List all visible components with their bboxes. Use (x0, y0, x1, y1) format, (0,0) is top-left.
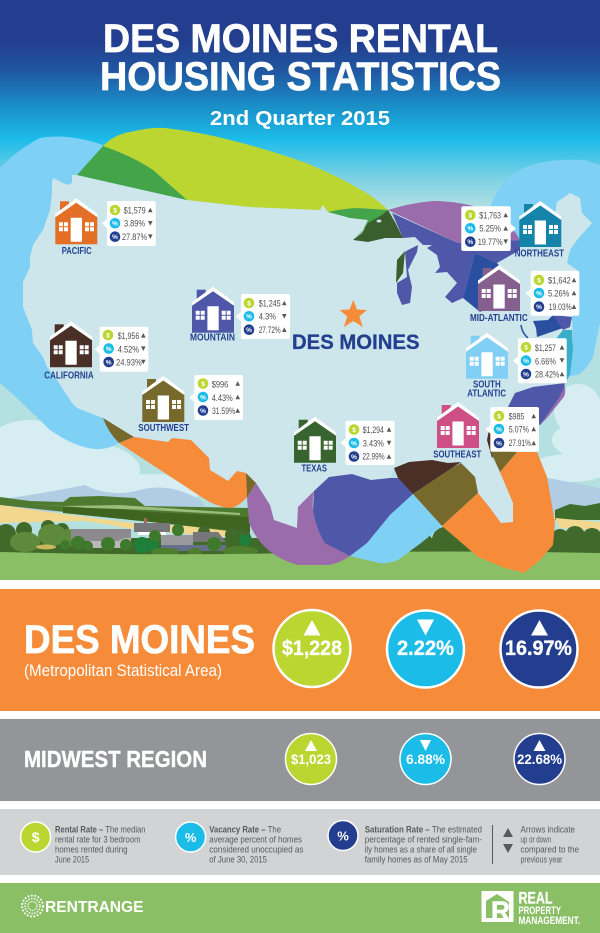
stats: Southeast: $985 (509, 412, 524, 422)
region: Texas (294, 417, 395, 475)
stats: Southeast: % (496, 440, 502, 447)
Chesapeake inlet (521, 325, 528, 338)
land (23, 175, 592, 528)
panel: Midwest Region statistics (0, 719, 600, 801)
label: South Atlantic: ATLANTIC (467, 388, 506, 400)
stats: Mid-Atlantic (526, 271, 579, 316)
stat: vacancy rate: 6.88% (406, 752, 445, 767)
region: Pacific (55, 198, 156, 257)
region: Lake Michigan (397, 245, 418, 305)
stats: Northeast: $1,763 (479, 210, 501, 220)
stats: California: $ (106, 332, 110, 339)
region: California (44, 321, 148, 382)
panel background (0, 719, 600, 801)
stats: California: % (106, 359, 112, 366)
region: Georgia olive (490, 450, 517, 472)
legend: saturation rate: ily homes as a share of all single (365, 844, 477, 856)
stats: South Atlantic: % (523, 371, 529, 378)
stats: South Atlantic: $1,257 (535, 343, 556, 353)
label: Northeast: NORTHEAST (515, 248, 564, 260)
stat: vacancy rate (387, 610, 464, 688)
footer (0, 883, 600, 933)
region: South Atlantic (466, 333, 567, 400)
stat: saturation rate: 22.68% (517, 752, 562, 767)
legend: rental rate: rental rate for 3 bedroom (55, 834, 141, 846)
region: Northeast (461, 201, 564, 260)
logo: Real Property Management: REAL (518, 888, 552, 908)
stats: Texas: 3.43% (363, 438, 384, 448)
stats: South Atlantic: $ (524, 345, 528, 352)
heading: Midwest Region: MIDWEST REGION (24, 746, 207, 772)
stats: Southeast: % (496, 426, 502, 433)
countryside landscape (0, 496, 600, 556)
house icon: Southeast (437, 402, 479, 448)
logo: Real Property Management: PROPERTY (518, 905, 561, 917)
stats: Pacific (102, 201, 156, 246)
label: Mid-Atlantic: MID-ATLANTIC (470, 312, 528, 324)
label: Texas: TEXAS (302, 463, 327, 475)
label: Southeast: SOUTHEAST (433, 449, 482, 461)
stats: California: $1,956 (118, 331, 139, 341)
stats: Texas: $1,294 (363, 425, 384, 435)
house icon: Southwest (142, 376, 184, 422)
stats: Mountain: 4.3% (259, 312, 276, 322)
region: green band (77, 146, 187, 200)
logo: Real Property Management: MANAGEMENT. (518, 915, 580, 927)
region: lower indigo band (508, 383, 565, 425)
stats: Northeast: % (467, 226, 473, 233)
region: purple gulf band (247, 483, 350, 565)
legend: arrows: previous year (520, 854, 562, 866)
region: small olive (246, 473, 256, 498)
pale fields (28, 504, 240, 515)
title (100, 17, 501, 99)
stats: Texas: % (351, 440, 357, 447)
region: purple band (388, 201, 520, 243)
hedges (151, 546, 258, 556)
stats: Pacific: % (112, 234, 118, 241)
region: Lake Superior (353, 210, 403, 242)
region: Texas indigo (313, 474, 413, 556)
region: southeast olive (413, 463, 478, 526)
label: Southwest: SOUTHWEST (138, 422, 189, 434)
grass (0, 552, 600, 580)
stats: California (95, 327, 148, 372)
map label: Des Moines: DES MOINES (292, 331, 420, 354)
stats: Mountain: $ (247, 300, 251, 307)
stats: Mountain (236, 294, 290, 339)
logo: Real Property Management: R (491, 896, 510, 926)
region: Mid-Atlantic (470, 265, 579, 324)
logo: RentRange (22, 896, 144, 916)
house icon: Mid-Atlantic (478, 265, 520, 311)
legend: vacancy rate: considered unoccupied as (209, 844, 304, 856)
stats: Mid-Atlantic: % (536, 290, 542, 297)
label: Mountain: MOUNTAIN (190, 332, 235, 344)
stats: Southeast: 27.91% (509, 438, 531, 448)
stat: saturation rate (514, 734, 565, 784)
region: Mountain (190, 287, 290, 344)
sky background (0, 0, 600, 580)
legend: saturation rate: Saturation Rate – The estimated (365, 824, 482, 836)
stats: Texas: 22.99% (362, 452, 385, 462)
panel: legend (0, 809, 600, 875)
subheading: (Metropolitan Statistical Area) (24, 661, 222, 680)
legend: rental rate: June 2015 (55, 854, 89, 866)
legend: arrows: compared to the (520, 844, 579, 856)
map of United States (0, 128, 600, 573)
foreground tree mass (0, 520, 600, 555)
region: indigo band (392, 213, 520, 303)
region: Southwest (138, 375, 243, 434)
house icon: Texas (294, 417, 336, 463)
stats: Mid-Atlantic: % (536, 304, 542, 311)
stats: Northeast: % (467, 239, 473, 246)
stats: Southwest: $ (201, 381, 205, 388)
stats: Texas: % (351, 454, 357, 461)
panel: Des Moines statistics (0, 589, 600, 711)
label: California: CALIFORNIA (44, 370, 94, 382)
title: DES MOINES RENTAL (103, 17, 498, 61)
stats: Southwest (189, 375, 243, 420)
stats: Southwest: $996 (212, 380, 228, 390)
stats: Southwest: 4.43% (212, 393, 233, 403)
region: lime band (103, 128, 388, 212)
clouds (0, 384, 600, 505)
stat: vacancy rate (400, 734, 451, 784)
east ocean shape (480, 160, 600, 378)
stats: Texas: $ (352, 427, 356, 434)
house icon: South Atlantic (466, 333, 508, 379)
stat: rental rate (286, 734, 336, 784)
stats: Northeast: 5.25% (479, 224, 501, 234)
stats: Mid-Atlantic: $1,642 (548, 276, 571, 286)
stats: South Atlantic: % (523, 358, 529, 365)
house icon: California (50, 321, 92, 367)
stats: California: % (106, 346, 112, 353)
region: southwest olive (103, 418, 134, 443)
stats: Mid-Atlantic: $ (537, 277, 541, 284)
yellow field (0, 505, 245, 538)
right side yellow field (555, 518, 600, 530)
legend: rental rate: homes rented during (55, 844, 128, 856)
legend: arrows: Arrows indicate (520, 824, 575, 836)
region: teal band (555, 330, 573, 383)
stats: Pacific: $1,579 (124, 206, 146, 216)
stats: Northeast: $ (468, 212, 472, 219)
stats: Southeast (485, 407, 539, 452)
stats: Mid-Atlantic: 19.03% (549, 302, 572, 312)
label: South Atlantic (467, 379, 506, 400)
white divider (0, 580, 600, 589)
Lake Michigan dark edge (396, 251, 405, 283)
stats: Pacific: % (112, 221, 118, 228)
logo: Real Property Management (482, 888, 580, 927)
stat: rental rate: $1,228 (282, 637, 342, 660)
stats: Pacific: 27.87% (122, 232, 147, 242)
lighter tree blobs (10, 524, 76, 552)
stats: Mid-Atlantic: 5.26% (548, 288, 569, 298)
stats: Pacific: 3.89% (124, 218, 145, 228)
stats: Mountain: % (246, 314, 252, 321)
legend background (0, 809, 600, 875)
legend: saturation rate (328, 820, 482, 866)
legend: rental rate: Rental Rate – The median (55, 824, 146, 836)
stat: saturation rate (500, 610, 578, 688)
legend: rental rate: $ (32, 829, 40, 845)
region: purple sliver (540, 386, 565, 425)
legend: vacancy rate: Vacancy Rate – The (209, 824, 281, 836)
stat: vacancy rate: 2.22% (397, 637, 454, 660)
right side trees (555, 503, 600, 520)
dark tree band (63, 507, 250, 532)
region: Georgia brown (487, 425, 500, 458)
footer background (0, 883, 600, 933)
stats: Pacific: $ (113, 207, 117, 214)
region: green lake band (328, 208, 388, 240)
stats: Mountain: $1,245 (259, 298, 281, 308)
stats: California: 24.93% (116, 358, 142, 368)
stats: Southwest: 31.59% (212, 406, 235, 416)
legend: saturation rate: % (337, 828, 349, 844)
legend: rental rate (21, 822, 146, 866)
stats: South Atlantic: 6.66% (535, 356, 556, 366)
star: Des Moines (340, 300, 367, 327)
legend: arrows: up or down (520, 834, 551, 846)
legend: vacancy rate: average percent of homes (209, 834, 302, 846)
region: indigo coast lip (553, 315, 572, 330)
stats: Mountain: 27.72% (259, 325, 281, 335)
stats: Southwest: % (200, 408, 206, 415)
stats: Southwest: % (200, 394, 206, 401)
stats: California: 4.52% (118, 344, 139, 354)
legend: vacancy rate: of June 30, 2015 (209, 854, 267, 866)
stat: saturation rate: 16.97% (505, 637, 572, 660)
region: southwest orange band (119, 437, 247, 508)
farm buildings (71, 518, 226, 551)
stats: Texas (341, 421, 395, 465)
stats: Northeast: 19.77% (478, 237, 503, 247)
legend: vacancy rate: % (185, 830, 197, 845)
legend: saturation rate: percentage of rented single-fam- (365, 834, 482, 846)
region: dark blue band (463, 253, 520, 312)
stats: South Atlantic (513, 338, 567, 383)
far tree line (0, 496, 250, 535)
label: South Atlantic: SOUTH (473, 379, 501, 391)
legend: vacancy rate (176, 822, 304, 866)
stats: South Atlantic: 28.42% (535, 370, 559, 380)
Lake Superior highlight (376, 220, 382, 222)
heading: Des Moines: DES MOINES (24, 618, 255, 662)
logo: RentRange: RENTRANGE (45, 899, 144, 916)
subtitle: 2nd Quarter 2015 (210, 108, 390, 130)
stats: Southeast: $ (497, 413, 501, 420)
region: southeast orange (442, 452, 555, 573)
stat: rental rate: $1,023 (291, 752, 331, 767)
stat: rental rate (274, 610, 350, 687)
farm trees (60, 524, 251, 553)
stats: Northeast (461, 206, 516, 251)
region: mid-atlantic coast band (533, 315, 563, 337)
title: HOUSING STATISTICS (100, 55, 501, 99)
stats: Southeast: 5.07% (509, 424, 529, 434)
panel background (0, 589, 600, 711)
house icon: Mountain (192, 287, 234, 333)
stats: Mountain: % (246, 327, 252, 334)
region: light blue gulf (350, 494, 442, 563)
region: Southeast (433, 402, 539, 461)
distant hills (10, 477, 600, 515)
legend: saturation rate: family homes as of May 2015 (365, 854, 468, 866)
west ocean shape (0, 137, 140, 449)
region: brown (394, 460, 461, 494)
house icon: Pacific (55, 198, 97, 244)
label: Pacific: PACIFIC (62, 245, 92, 257)
legend: arrows (492, 824, 579, 866)
house icon: Northeast (519, 201, 561, 247)
